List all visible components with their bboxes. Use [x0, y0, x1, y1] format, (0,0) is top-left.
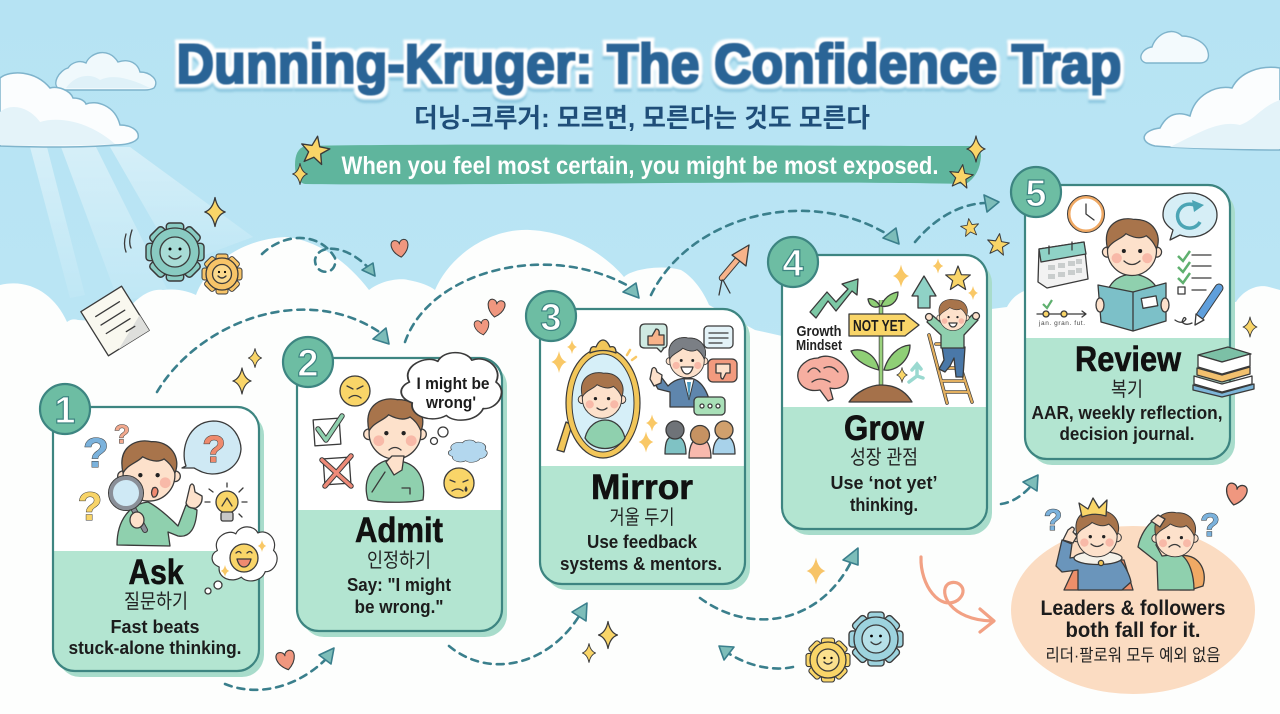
label: Growth Mindset: Mindset — [796, 338, 842, 354]
icon: growth zigzag arrow — [810, 279, 858, 318]
card 5: Review — [1011, 167, 1254, 465]
card 1 number badge — [40, 384, 90, 434]
card 1 mint panel — [53, 551, 259, 671]
icon: timeline — [1037, 300, 1086, 327]
thought bubble: I might be wrong — [401, 353, 502, 444]
card 3 body text: Use feedback — [587, 532, 698, 552]
arrow: bottom 1 — [225, 648, 334, 690]
cloud: top right small — [1141, 32, 1208, 63]
icon: kid on ladder — [926, 299, 980, 403]
card 3 number badge — [526, 291, 576, 341]
arrow: 1 to 2 — [157, 310, 389, 392]
icon: clock — [1068, 196, 1104, 232]
icon: green dots bubble — [694, 397, 725, 415]
flow arrows — [157, 195, 1038, 690]
card 4: Grow — [768, 237, 992, 535]
callout: leaders and followers — [1011, 498, 1255, 694]
callout english text: Leaders & followers — [1040, 597, 1226, 620]
card 1 heading: Ask — [128, 553, 184, 592]
card 5 border — [1025, 185, 1230, 459]
callout korean text: 리더·팔로워 모두 예외 없음 — [1046, 646, 1220, 665]
card 5 mint panel — [1025, 338, 1230, 459]
icon: angry face — [340, 376, 370, 406]
tagline banner — [293, 134, 985, 189]
card 1 border — [53, 407, 259, 671]
card 4 shadow — [787, 261, 992, 535]
card 2 body text: be wrong." — [354, 597, 444, 617]
callout question marks — [1044, 504, 1220, 543]
sparkles near mirror — [551, 340, 658, 452]
stars and sparkles — [893, 258, 978, 382]
icon: cross box — [322, 456, 351, 486]
card 4 heading: Grow — [844, 409, 925, 448]
card 2 mint panel — [297, 510, 502, 631]
icon: orange gear with face — [202, 254, 242, 294]
card 1 body text: Fast beats — [110, 617, 200, 637]
icon: check box — [313, 416, 342, 446]
card 2: Admit — [283, 337, 507, 637]
icon: question marks: ? — [83, 429, 109, 476]
icon: plant with not yet sign — [849, 292, 919, 402]
card 5 heading: Review — [1075, 340, 1182, 379]
card 4 number badge: 4 — [782, 243, 804, 285]
icon: plant with not yet sign: NOT YET — [853, 318, 905, 335]
card 1 illustration: boy with magnifier — [108, 441, 202, 546]
icon: blue cloud — [448, 440, 487, 462]
icon: question marks: ? — [114, 419, 130, 449]
king figure — [1056, 498, 1133, 590]
card 4 body text: Use ‘not yet’ — [830, 473, 938, 493]
card 2 illustration: thinking boy — [364, 399, 426, 502]
card 2 heading: Admit — [355, 511, 443, 550]
callout peach blob — [1011, 526, 1255, 694]
card 4 korean label: 성장 관점 — [850, 446, 918, 469]
card 3 white top — [540, 309, 745, 584]
banner text: When you feel most certain, you might be most exposed. — [342, 152, 938, 180]
cloud: left large — [0, 73, 138, 147]
callout question marks: ? — [1200, 507, 1220, 543]
icon: calendar — [1038, 242, 1088, 288]
card 3 mint panel — [540, 466, 745, 584]
banner stars — [293, 134, 985, 189]
card 2 body text: Say: "I might — [347, 575, 451, 595]
callout english text: both fall for it. — [1066, 619, 1200, 642]
icon: light bulb — [205, 483, 247, 521]
arrow: gears back — [719, 646, 793, 669]
arrow: 4 to 5 — [915, 195, 999, 242]
card 1 shadow — [58, 413, 264, 677]
boy reading book — [1096, 219, 1169, 331]
card 1 korean label: 질문하기 — [124, 590, 188, 613]
icon: teal gear with face — [124, 223, 204, 281]
card 2 number badge — [283, 337, 333, 387]
card 4 border — [782, 255, 987, 529]
icon: teal up arrow — [912, 276, 936, 308]
icon: presenter man — [650, 338, 711, 407]
icon: question marks: ? — [78, 485, 102, 529]
icon: paper note — [81, 286, 149, 356]
arrow: to review — [1001, 475, 1038, 504]
card 5 shadow — [1030, 191, 1235, 465]
icon: sad face — [444, 468, 474, 498]
icon: question marks — [78, 419, 130, 529]
icon: bottom yellow gear with face — [806, 638, 850, 682]
cloud: top left small — [56, 53, 156, 90]
callout question marks: ? — [1044, 504, 1062, 537]
arrow: bottom 2 — [449, 603, 587, 664]
icon: brain — [798, 356, 848, 401]
white cloud ground — [0, 230, 1280, 714]
card 4 number badge — [768, 237, 818, 287]
icon: rising orange arrow — [719, 245, 749, 295]
title: Dunning-Kruger: The Confidence Trap — [176, 32, 1122, 95]
icon: mirror with reflection — [557, 340, 640, 458]
icon: chat bubble — [704, 326, 733, 348]
arrow: bottom 3 — [700, 548, 858, 619]
icon: question speech bubble — [182, 421, 241, 474]
icon: small teal branch arrow — [909, 364, 923, 382]
card 1 white top — [53, 407, 259, 671]
icon: refresh bubble — [1163, 193, 1217, 240]
sun rays — [30, 147, 253, 300]
card 3 border — [540, 309, 745, 584]
decorative sparkles and hearts — [205, 198, 1257, 672]
arrow: orange swirl to callout — [921, 557, 994, 632]
arrow: 3 to 4 — [651, 211, 899, 295]
icon: bottom teal gear with face — [849, 612, 903, 666]
card 5 number badge: 5 — [1025, 173, 1047, 215]
card 4 white top — [782, 255, 987, 529]
icon: question speech bubble: ? — [202, 429, 226, 471]
card 5 body text: AAR, weekly reflection, — [1032, 403, 1222, 423]
card 2 number badge: 2 — [297, 343, 319, 385]
card 3 body text: systems & mentors. — [560, 554, 722, 574]
card 1: Ask — [40, 384, 277, 677]
thought bubble: I might be wrong: I might be — [416, 374, 490, 393]
card 5 white top — [1025, 185, 1230, 459]
card 3 number badge: 3 — [540, 297, 562, 339]
thought bubble: I might be wrong: wrong' — [425, 393, 476, 412]
card 2 shadow — [302, 364, 507, 637]
card 2 korean label: 인정하기 — [367, 549, 431, 572]
icon: thumbs-down box — [708, 359, 737, 382]
card 3: Mirror — [526, 291, 750, 590]
card 5 body text: decision journal. — [1060, 424, 1194, 444]
card 1 body text: stuck-alone thinking. — [68, 638, 242, 658]
follower figure — [1138, 512, 1204, 590]
icon: timeline: jan. gran. fut. — [1038, 320, 1085, 327]
icon: stack of books — [1193, 347, 1254, 397]
icon: checklist — [1178, 251, 1211, 294]
card 4 body text: thinking. — [850, 495, 918, 515]
audience group — [665, 421, 735, 458]
banner ribbon — [295, 145, 981, 184]
card 3 heading: Mirror — [591, 468, 693, 507]
card 1 number badge: 1 — [54, 390, 76, 432]
label: Growth Mindset: Growth — [796, 324, 842, 340]
card 5 korean label: 복기 — [1111, 378, 1143, 401]
card 2 border — [297, 358, 502, 631]
card 5 number badge — [1011, 167, 1061, 217]
card 3 korean label: 거울 두기 — [610, 506, 674, 529]
icon: thumbs-up box — [640, 324, 667, 352]
icon: pen — [1175, 288, 1219, 325]
arrow: loop at top — [262, 238, 375, 276]
korean subtitle: 더닝-크루거: 모르면, 모른다는 것도 모른다 — [414, 103, 870, 133]
card 4 mint panel — [782, 407, 987, 529]
card 2 white top — [297, 358, 502, 631]
icon: happy thought bubble — [205, 527, 277, 594]
cloud: right large — [1144, 67, 1280, 150]
card 3 shadow — [545, 315, 750, 590]
arrow: 2 to 3 — [405, 265, 639, 342]
